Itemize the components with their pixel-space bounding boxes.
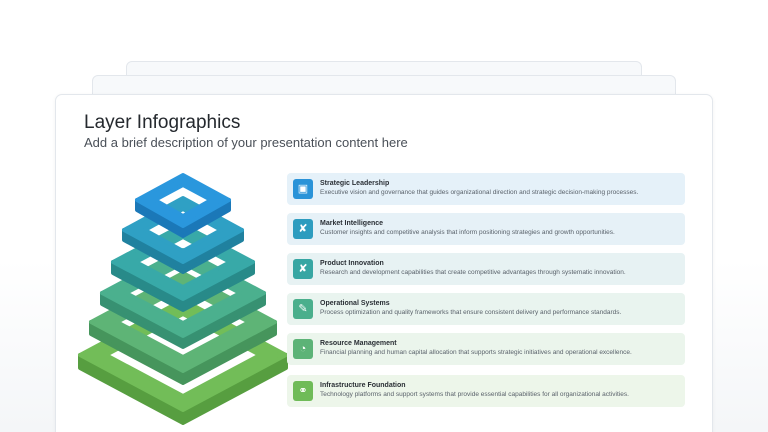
icon: briefcase <box>293 179 313 199</box>
main panel <box>55 94 713 432</box>
icon: tools: ✘ <box>298 223 308 235</box>
icon: link: ⚭ <box>298 385 308 397</box>
card: Operational Systems: Process optimization and quality frameworks that ensure consistent delivery and performance standards. <box>320 309 621 316</box>
card: Operational Systems <box>287 293 685 325</box>
icon: briefcase: ▣ <box>298 183 308 195</box>
title: Layer Infographics <box>84 112 240 133</box>
card: Resource Management: Resource Management <box>320 340 397 347</box>
card: Market Intelligence: Market Intelligence <box>320 220 383 227</box>
card: Market Intelligence: Customer insights and competitive analysis that inform positioning strategies and growth opportunities. <box>320 229 615 236</box>
card: Resource Management: Financial planning and human capital allocation that supports strategic initiatives and operational excellence. <box>320 349 632 356</box>
card: Market Intelligence <box>287 213 685 245</box>
card: Strategic Leadership <box>287 173 685 205</box>
icon: chart: ◔ <box>300 343 306 355</box>
layer 6 <box>80 300 286 423</box>
subtitle: Add a brief description of your presentation content here <box>84 135 408 150</box>
layer 5 <box>91 273 275 383</box>
layer 4 <box>102 250 264 347</box>
icon: pen <box>293 299 313 319</box>
card: Infrastructure Foundation: Technology platforms and support systems that provide essential capabilities for all organizational activities. <box>320 391 629 398</box>
back sheet 2 <box>92 75 676 135</box>
icon: tools <box>293 259 313 279</box>
layer 2 <box>124 198 242 272</box>
card: Operational Systems: Operational Systems <box>320 300 390 307</box>
icon: tools <box>293 219 313 239</box>
card: Product Innovation: Research and development capabilities that create competitive advantages through systematic innovation. <box>320 269 626 276</box>
card: Product Innovation <box>287 253 685 285</box>
layer 1 <box>137 175 229 236</box>
back sheet 1 <box>126 61 642 121</box>
card: Infrastructure Foundation <box>287 375 685 407</box>
card: Product Innovation: Product Innovation <box>320 260 384 267</box>
icon: chart <box>293 339 313 359</box>
icon: tools: ✘ <box>298 263 308 275</box>
card: Strategic Leadership: Executive vision and governance that guides organizational direction and strategic decision-making processes. <box>320 189 638 196</box>
card: Strategic Leadership: Strategic Leadership <box>320 180 389 187</box>
card: Infrastructure Foundation: Infrastructure Foundation <box>320 382 406 389</box>
icon: link <box>293 381 313 401</box>
icon: pen: ✎ <box>298 303 308 315</box>
card: Resource Management <box>287 333 685 365</box>
layer 3 <box>113 225 253 310</box>
